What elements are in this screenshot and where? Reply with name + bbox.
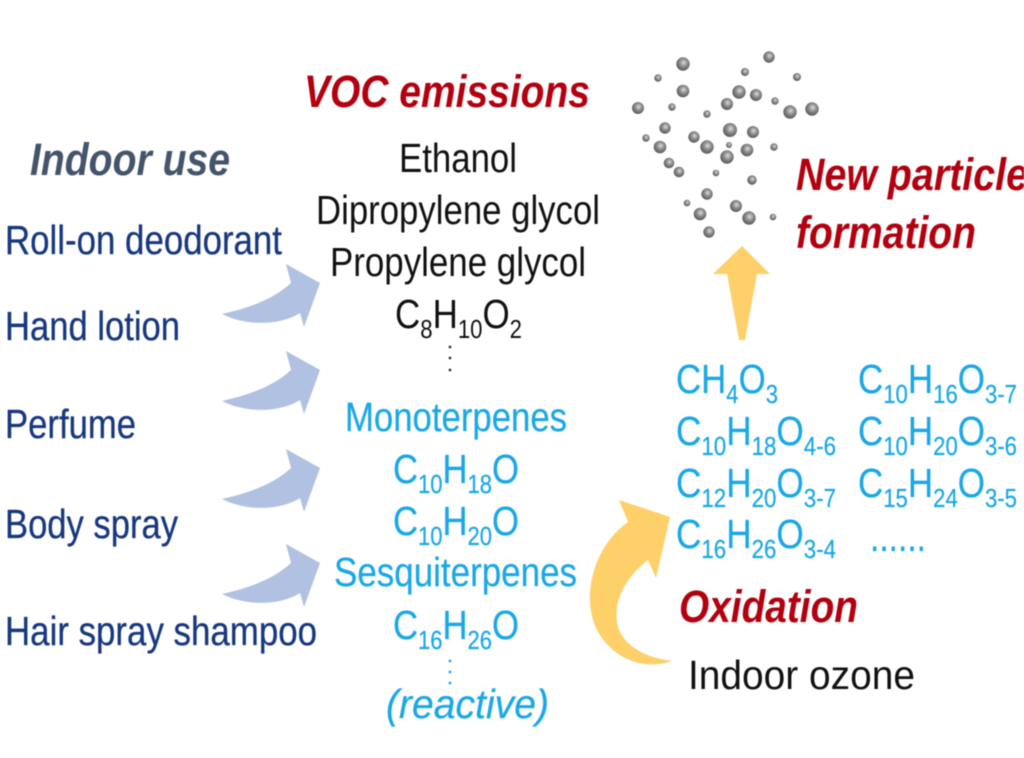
product: C12H20O3-7: C (676, 460, 706, 506)
product: C16H26O3-4: C (676, 511, 706, 557)
product: C10H18O4-6: H (726, 408, 752, 454)
product: hand lotion: Hand lotion (5, 303, 180, 349)
product: C15H24O3-5: O (958, 460, 985, 506)
arrow: up to particles (713, 246, 770, 340)
compound: C16H26O: H (443, 602, 468, 648)
arrow 4 (222, 544, 320, 607)
compound: C10H18O: 10 (418, 469, 443, 499)
compound: C10H20O: C (393, 498, 423, 544)
compound: dipropylene glycol: Dipropylene glycol (316, 187, 600, 233)
product: C10H16O3-7: O (958, 356, 985, 402)
product: C15H24O3-5: H (908, 460, 933, 506)
product: hair spray shampoo: Hair spray shampoo (5, 608, 317, 654)
product: CH4O3: 4 (726, 379, 739, 409)
particles (632, 51, 819, 238)
compound: C10H20O: H (443, 498, 468, 544)
product: C10H16O3-7: 10 (883, 379, 908, 409)
product: C10H16O3-7: 3-7 (985, 379, 1017, 409)
product: C10H16O3-7: H (908, 356, 933, 402)
product: C10H18O4-6: O (776, 408, 804, 454)
compound: propylene glycol: Propylene glycol (330, 239, 586, 285)
arrow 2 (222, 351, 320, 414)
list: non-reactive VOCs (316, 135, 600, 371)
product: perfume: Perfume (5, 401, 136, 447)
label: indoor ozone: Indoor ozone (688, 652, 915, 698)
group name: sesquiterpenes: Sesquiterpenes (334, 549, 577, 595)
line: formation: formation (796, 207, 976, 258)
continuation dots: ...... (870, 514, 926, 560)
compound: C8H10O2: 2 (510, 314, 522, 344)
arrow: curved oxidation (590, 500, 672, 664)
compound: C10H18O: C (393, 446, 423, 492)
product: C15H24O3-5: 3-5 (985, 483, 1017, 513)
product: C15H24O3-5: 24 (933, 483, 958, 513)
product: CH4O3: CH (676, 356, 735, 402)
product: C16H26O3-4: H (726, 511, 752, 557)
product: C10H18O4-6: C (676, 408, 706, 454)
compound: C8H10O2: C (395, 291, 425, 337)
compound: C8H10O2: 10 (458, 314, 482, 344)
arrow 1 (222, 264, 320, 327)
product: C12H20O3-7: 3-7 (804, 483, 836, 513)
product: C15H24O3-5: 15 (883, 483, 908, 513)
compound: C16H26O: 26 (468, 625, 492, 655)
list: indoor products (5, 217, 317, 654)
product: C10H20O3-6: C (858, 408, 888, 454)
arrow 3 (222, 449, 320, 512)
product: CH4O3: O (739, 356, 766, 402)
product: C12H20O3-7: O (776, 460, 804, 506)
product: C10H20O3-6: H (908, 408, 933, 454)
product: C12H20O3-7: 12 (701, 483, 726, 513)
product: body spray: Body spray (5, 501, 178, 547)
product: CH4O3: 3 (766, 379, 778, 409)
product: C16H26O3-4: 16 (701, 534, 726, 564)
compound: C8H10O2: O (482, 291, 510, 337)
heading: oxidation: Oxidation (679, 581, 858, 632)
product: C12H20O3-7: 20 (752, 483, 776, 513)
compound: C10H18O: O (492, 446, 519, 492)
compound: ethanol: Ethanol (399, 135, 517, 181)
list: oxidation products (676, 356, 1017, 564)
compound: C10H20O: O (492, 498, 519, 544)
label: reactive: (reactive) (386, 681, 549, 727)
group name: monoterpenes: Monoterpenes (345, 394, 567, 440)
product: C16H26O3-4: 3-4 (804, 534, 836, 564)
compound: C10H20O: 10 (418, 521, 443, 551)
heading: VOC emissions: VOC emissions (304, 66, 590, 117)
product: C16H26O3-4: 26 (752, 534, 776, 564)
heading: new particle formation (796, 149, 1024, 258)
product: C12H20O3-7: H (726, 460, 752, 506)
vertical ellipsis (449, 346, 451, 371)
compound: C10H18O: H (443, 446, 468, 492)
product: roll-on deodorant: Roll-on deodorant (5, 217, 283, 263)
product: C10H20O3-6: 10 (883, 431, 908, 461)
compound: C8H10O2: 8 (420, 314, 433, 344)
compound: C10H18O: 18 (468, 469, 492, 499)
product: C16H26O3-4: O (776, 511, 804, 557)
product: C10H18O4-6: 18 (752, 431, 776, 461)
product: C10H20O3-6: 3-6 (985, 431, 1017, 461)
product: C10H18O4-6: 10 (701, 431, 726, 461)
compound: C16H26O: C (393, 602, 423, 648)
product: C10H16O3-7: 16 (933, 379, 958, 409)
product: C15H24O3-5: C (858, 460, 888, 506)
vertical ellipsis (449, 660, 451, 684)
product: C10H18O4-6: 4-6 (804, 431, 836, 461)
list: reactive VOCs (334, 394, 577, 727)
compound: C10H20O: 20 (468, 521, 492, 551)
product: C10H20O3-6: O (958, 408, 985, 454)
product: C10H20O3-6: 20 (933, 431, 958, 461)
compound: C16H26O: O (492, 602, 519, 648)
compound: C8H10O2: H (433, 291, 458, 337)
product: C10H16O3-7: C (858, 356, 888, 402)
compound: C16H26O: 16 (418, 625, 443, 655)
blue arrows (222, 264, 320, 607)
heading: indoor use: Indoor use (30, 134, 230, 185)
